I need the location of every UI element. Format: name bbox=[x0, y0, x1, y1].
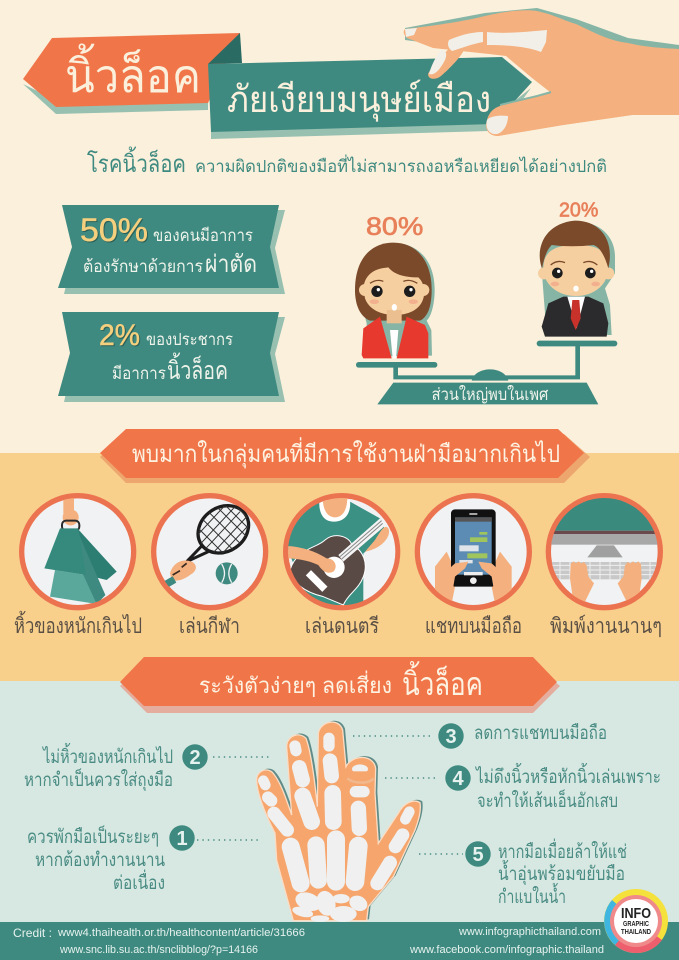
callout: 2 percent: 2% bbox=[99, 319, 140, 352]
icon: hand gripping the banner, back part bbox=[404, 8, 679, 136]
icon: man bbox=[538, 221, 615, 337]
tip 5: 5 bbox=[472, 844, 484, 866]
label: chatting on mobile: แชทบนมือถือ bbox=[425, 615, 522, 638]
publisher links: www.facebook.com/infographic.thailand bbox=[409, 944, 604, 956]
percent label: men: 20% bbox=[559, 200, 599, 222]
tip 3: 3 bbox=[445, 726, 457, 748]
tip 1: ต่อเนื่อง bbox=[113, 869, 165, 894]
publisher links: www.infographicthailand.com bbox=[458, 926, 601, 938]
subtitle text: ภัยเงียบมนุษย์เมือง bbox=[227, 79, 491, 122]
tip 5 bbox=[419, 838, 627, 908]
tip 1: 1 bbox=[176, 828, 188, 850]
tip 4 bbox=[385, 763, 661, 812]
tip 3: ลดการแชทบนมือถือ bbox=[474, 723, 607, 744]
logo: Infographic Thailand bbox=[604, 889, 668, 953]
icon: hand x-ray bbox=[257, 721, 423, 922]
icon: shopping bags bbox=[22, 493, 134, 608]
label: playing sports: เล่นกีฬา bbox=[179, 615, 240, 638]
callout: 50 percent: 50% bbox=[80, 212, 148, 248]
callout: 50 percent: ต้องรักษาด้วยการ bbox=[83, 257, 203, 276]
heading banner: risk groups: พบมากในกลุ่มคนที่มีการใช้งานฝ่ามือมากเกินไป bbox=[132, 437, 560, 469]
heading banner: risk groups bbox=[100, 429, 590, 483]
credit sources: www4.thaihealth.or.th/healthcontent/article/31666 bbox=[57, 927, 305, 939]
scale beams and base bbox=[356, 341, 617, 404]
intro sentence: ความผิดปกติของมือที่ไม่สามารถงอหรือเหยียดได้อย่างปกติ bbox=[195, 154, 607, 176]
callout: 50 percent bbox=[58, 205, 285, 294]
panel: footer credits bbox=[0, 889, 679, 960]
chart: gender balance scale bbox=[355, 200, 617, 404]
icon: phone in hands bbox=[417, 496, 529, 608]
logo: Infographic Thailand: GRAPHIC bbox=[623, 921, 649, 928]
tip 4: จะทำให้เส้นเอ็นอักเสบ bbox=[477, 788, 618, 812]
logo: Infographic Thailand: INFO bbox=[621, 905, 651, 922]
label: playing music: เล่นดนตรี bbox=[305, 615, 379, 638]
callout: 2 percent: ของประชากร bbox=[146, 330, 233, 349]
callout: 2 percent: นิ้วล็อค bbox=[167, 352, 228, 385]
title banner: orange bbox=[23, 33, 242, 114]
logo: Infographic Thailand: THAILAND bbox=[621, 929, 651, 936]
scale label: ส่วนใหญ่พบในเพศ bbox=[432, 385, 549, 404]
tip 1 bbox=[27, 824, 261, 894]
credit sources: www.snc.lib.su.ac.th/snclibblog/?p=14166 bbox=[59, 944, 258, 956]
tip 5: กำแบในน้ำ bbox=[498, 883, 566, 908]
credit sources: Credit : bbox=[13, 926, 52, 940]
tip 2: ไม่หิ้วของหนักเกินไป bbox=[41, 743, 173, 768]
heading banner: prevention tips bbox=[120, 657, 560, 713]
tip 5: หากมือเมื่อยล้าให้แช่ bbox=[498, 838, 627, 863]
publisher links bbox=[409, 926, 604, 956]
icon: typing at keyboard bbox=[547, 493, 660, 608]
icon: guitar player bbox=[280, 496, 400, 608]
percent label: women: 80% bbox=[366, 213, 423, 241]
icon: hand fingers, thumb and splints bbox=[405, 28, 640, 136]
tip 3 bbox=[353, 723, 607, 749]
tip 2: 2 bbox=[189, 747, 201, 769]
icon: woman bbox=[355, 243, 435, 358]
panel: prevention tips bbox=[0, 657, 679, 922]
heading banner: prevention tips: ระวังตัวง่ายๆ ลดเสี่ยง bbox=[199, 670, 392, 698]
tip 2: หากจำเป็นควรใส่ถุงมือ bbox=[24, 767, 173, 792]
tip 1: หากต้องทำงานนาน bbox=[35, 850, 165, 871]
callout: 2 percent bbox=[58, 312, 285, 402]
callout: 50 percent: ผ่าตัด bbox=[205, 251, 257, 278]
tip 5: น้ำอุ่นพร้อมขยับมือ bbox=[498, 860, 625, 886]
tip 1: ควรพักมือเป็นระยะๆ bbox=[27, 824, 159, 848]
intro sentence bbox=[87, 146, 607, 178]
callout: 2 percent: มีอาการ bbox=[112, 364, 166, 383]
title text: นิ้วล็อค bbox=[65, 43, 201, 102]
credit sources bbox=[13, 926, 305, 956]
intro sentence: โรคนิ้วล็อค bbox=[87, 146, 186, 178]
icon: tennis racket bbox=[154, 487, 267, 608]
panel: risk groups bbox=[0, 429, 679, 681]
label: carrying heavy things: หิ้วของหนักเกินไป bbox=[14, 611, 142, 638]
label: typing for long periods: พิมพ์งานนานๆ bbox=[550, 614, 662, 638]
title banner: teal bbox=[208, 57, 532, 139]
panel: header and statistics bbox=[0, 0, 679, 453]
tip 2 bbox=[24, 743, 270, 792]
heading banner: prevention tips: นิ้วล็อค bbox=[402, 661, 483, 702]
callout: 50 percent: ของคนมีอาการ bbox=[153, 226, 253, 245]
tip 4: 4 bbox=[452, 768, 464, 790]
